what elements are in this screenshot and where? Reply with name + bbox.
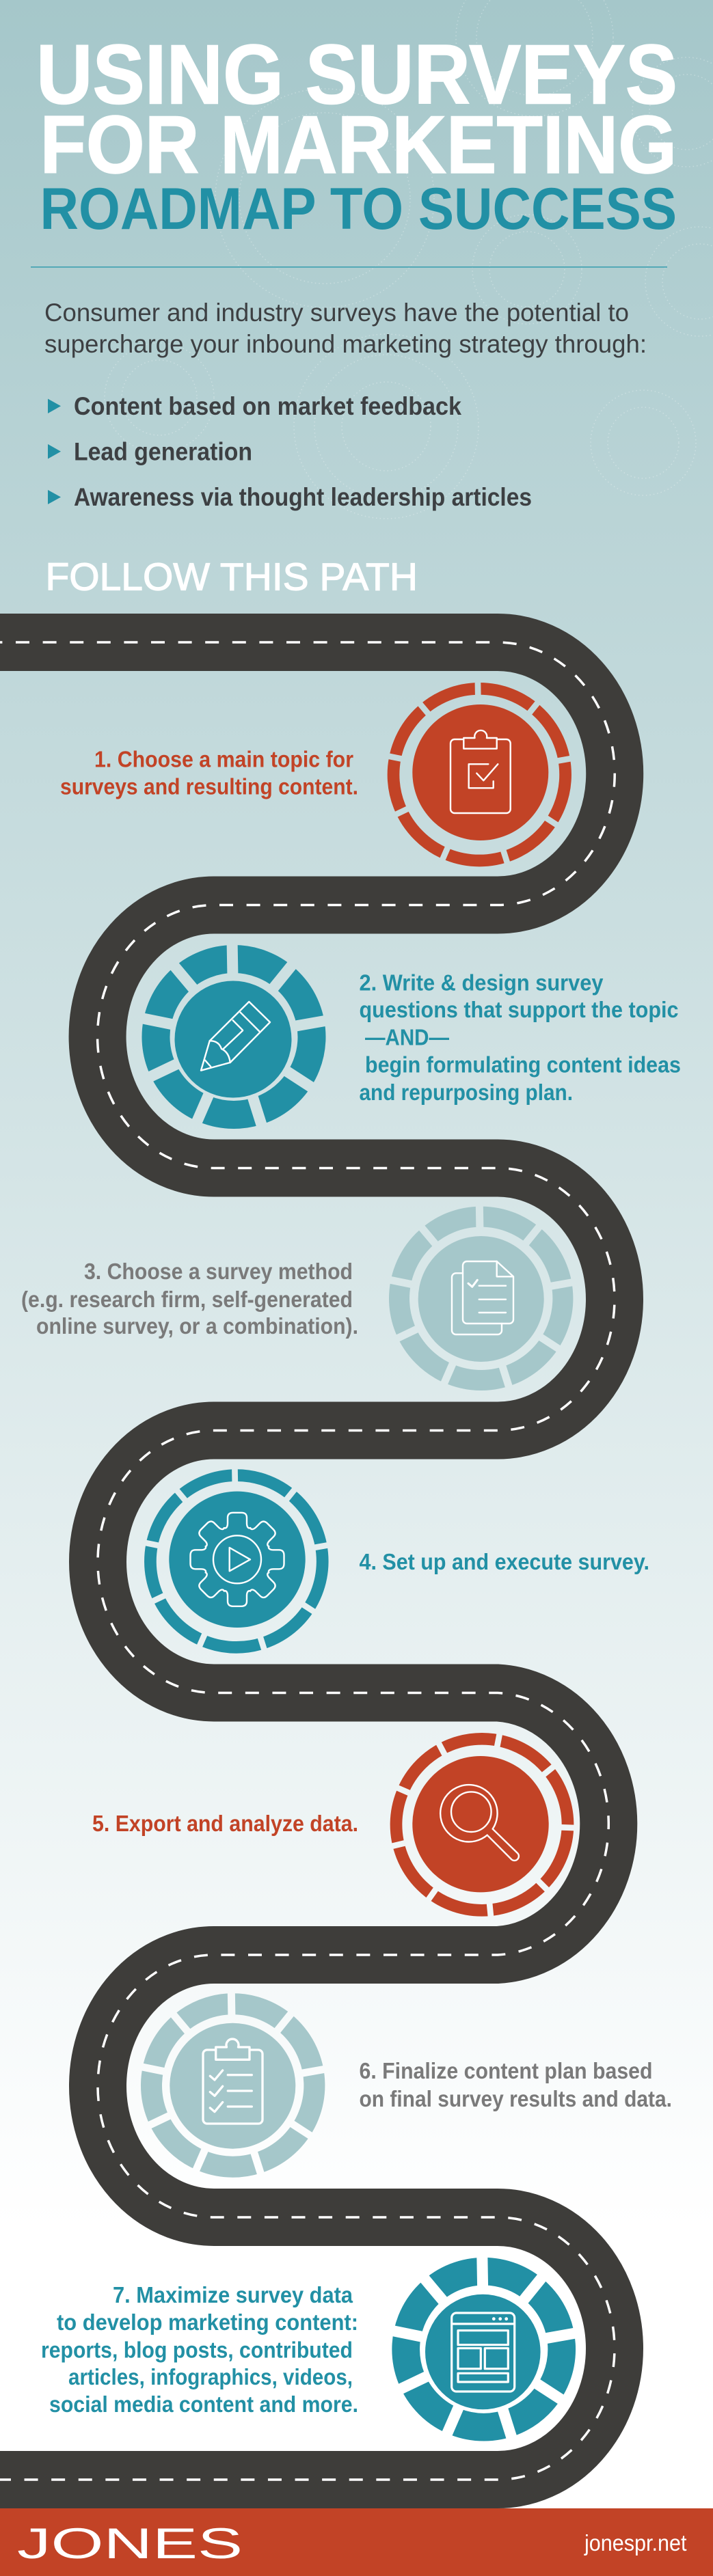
step 3 text: 3. Choose a survey method: [84, 1259, 353, 1284]
step 7 text: [41, 2282, 358, 2417]
step 7 text: to develop marketing content:: [57, 2310, 358, 2335]
title: FOR MARKETING: [40, 99, 677, 191]
step 4 text: 4. Set up and execute survey.: [360, 1549, 649, 1574]
step 5 text: 5. Export and analyze data.: [92, 1811, 358, 1836]
winding road: [0, 642, 615, 2480]
icon: step 3 documents: [399, 1217, 563, 1380]
icon: step 1 clipboard check: [394, 689, 565, 861]
step 7 text: reports, blog posts, contributed: [41, 2337, 353, 2363]
step 1 text: 1. Choose a main topic for: [94, 746, 353, 772]
title: USING SURVEYS: [36, 29, 677, 122]
divider line: [31, 266, 667, 268]
step 2 text: begin formulating content ideas: [365, 1052, 681, 1078]
icon: bullet triangle 3: [48, 490, 61, 504]
icon: bullet triangle 1: [48, 399, 61, 413]
heading: follow this path: FOLLOW THIS PATH: [45, 556, 418, 599]
icon: step 5 magnifying glass: [396, 1739, 567, 1910]
step 2 text: —AND—: [365, 1025, 449, 1050]
background dotted gear pattern: [105, 0, 713, 519]
footer logo: JONES: [17, 2520, 243, 2568]
step 1 text: [60, 746, 358, 799]
icon: bullet triangle 2: [48, 444, 61, 459]
step 2 text: and repurposing plan.: [360, 1080, 573, 1105]
icon: step 6 checklist clipboard: [152, 2004, 314, 2167]
icon: step 7 web page layout: [406, 2271, 562, 2427]
step 2 text: [360, 970, 681, 1105]
step 7 text: 7. Maximize survey data: [113, 2282, 353, 2307]
step 7 text: social media content and more.: [49, 2392, 358, 2417]
step 6 text: 6. Finalize content plan based: [360, 2058, 652, 2083]
step 3 text: (e.g. research firm, self-generated: [21, 1287, 353, 1312]
intro paragraph: Consumer and industry surveys have the potential to: [44, 299, 629, 327]
footer url: jonespr.net: [584, 2530, 686, 2556]
bullet 3: Awareness via thought leadership articles: [74, 483, 532, 511]
step 7 text: articles, infographics, videos,: [68, 2364, 353, 2389]
bullet 1: Content based on market feedback: [74, 392, 461, 420]
step 3 text: online survey, or a combination).: [36, 1313, 358, 1339]
intro paragraph: [44, 299, 647, 358]
bullet list: [48, 392, 532, 511]
step 3 text: [21, 1259, 358, 1339]
icon: step 2 pencil: [156, 959, 312, 1115]
step 6 text: on final survey results and data.: [360, 2086, 672, 2111]
title: [36, 29, 677, 242]
step 6 text: [360, 2058, 672, 2111]
footer: [0, 2508, 713, 2576]
step 2 text: 2. Write & design survey: [360, 970, 604, 996]
step 1 text: surveys and resulting content.: [60, 773, 358, 799]
icon: step 4 gear with play button: [150, 1475, 323, 1647]
bullet 2: Lead generation: [74, 437, 252, 466]
intro paragraph: supercharge your inbound marketing strategy through:: [44, 330, 647, 358]
step 2 text: questions that support the topic: [360, 997, 678, 1022]
